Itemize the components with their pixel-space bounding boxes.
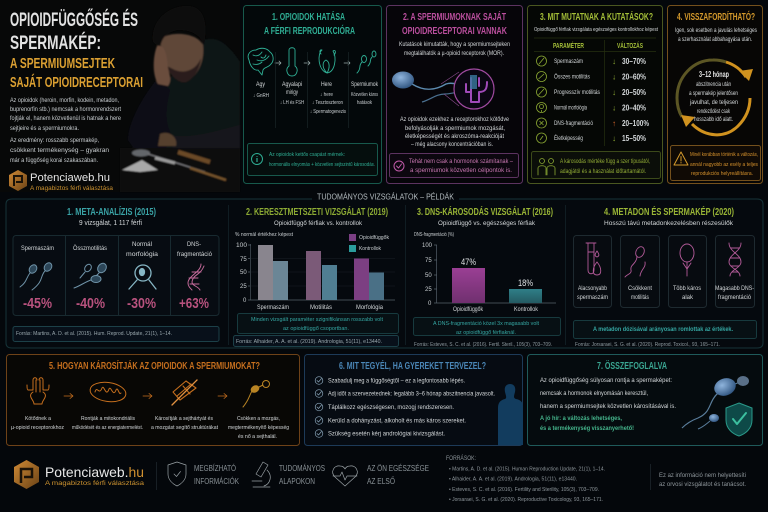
card captions: fragmentáció <box>718 295 752 301</box>
footer sources: • Esteves, S. C. et al. (2016). Fertility and Sterility, 105(3), 703–709. <box>449 487 599 493</box>
arrow <box>218 394 227 398</box>
study 2 heading: 2. KERESZTMETSZETI VIZSGÁLAT (2019) <box>246 205 388 218</box>
table rows: 15–50% <box>622 134 646 143</box>
hero title: SPERMAKÉP: <box>10 32 101 54</box>
study 2 callout: az opioidfüggő csoportban. <box>283 326 349 332</box>
step captions <box>11 416 289 440</box>
panel 4: reversibility <box>668 6 762 184</box>
column labels: ↓ here <box>320 92 333 98</box>
studies section frame <box>6 199 763 348</box>
summary text <box>540 377 676 432</box>
study 2 source: Forrás: Alhaider, A. A. et al. (2019). Andrologia, 51(11), e13440. <box>236 339 382 345</box>
column labels: ↓ LH és FSH <box>280 100 304 106</box>
study 1 metric cards: Spermaszám <box>21 246 54 252</box>
table rows: Spermaszám <box>554 59 583 65</box>
study 3 callout: A DNS-fragmentáció közel 3x magasabb volt <box>433 321 539 327</box>
study 3 bar chart: Kontrollok <box>514 307 539 313</box>
study 3: DNA damage <box>414 205 560 348</box>
icon: damaged membrane <box>172 380 197 405</box>
table rows: ↓ <box>612 57 616 66</box>
panel 7: summary <box>528 354 762 446</box>
table rows: ↓ <box>612 72 616 82</box>
trust badge: your health first: AZ ELSŐ <box>367 477 395 486</box>
card captions: Magasabb DNS- <box>715 286 754 292</box>
footer logo: Potenciaweb.hu <box>45 464 144 480</box>
card captions: spermaszám <box>577 295 608 301</box>
panel 5 heading: 5. HOGYAN KÁROSÍTJÁK AZ OPIOIDOK A SPERMIUMOKAT? <box>49 359 260 372</box>
icon: test tube with drop <box>586 243 601 275</box>
step captions: Károsítják a sejthártyát és <box>155 416 213 422</box>
hero panel <box>0 0 240 192</box>
arrow <box>275 61 281 65</box>
table rows: Életképesség <box>554 135 583 142</box>
table rows: 20–40% <box>622 104 646 112</box>
hero intro text: csökkent termékenység – gyakran <box>10 147 109 154</box>
checklist <box>315 377 495 438</box>
study 2 bar chart: Motilitás <box>310 305 332 311</box>
panel 3 subtitle: Opioidfüggő férfiak vizsgálata egészséges kontrollokhoz képest <box>534 27 659 33</box>
study 3 callout: az opioidfüggő férfiaknál. <box>456 330 516 336</box>
study 1 subtitle: 9 vizsgálat, 1 117 férfi <box>79 220 142 227</box>
table rows: Progresszív motilitás <box>554 90 600 96</box>
study 1 metric cards: +63% <box>179 295 209 312</box>
icon: magnifier over sperm <box>129 265 156 289</box>
footer sources: FORRÁSOK: <box>446 455 476 462</box>
study 3 bar chart: 25 <box>425 287 432 293</box>
table rows: 30–70% <box>622 57 646 66</box>
panel 2 body: – még alacsony koncentrációban is. <box>411 142 493 148</box>
step captions: és nő a sejthalál. <box>238 434 277 440</box>
icon: dna <box>729 243 741 276</box>
table rows: ↓ <box>612 134 616 143</box>
column labels: ↓ GnRH <box>253 93 269 99</box>
trust badge: reliable information: INFORMÁCIÓK <box>194 477 240 486</box>
trust badge: your health first: AZ ÖN EGÉSZSÉGE <box>367 464 429 473</box>
panel 6: what to do when planning a child <box>304 354 523 446</box>
study 1 heading: 1. META-ANALÍZIS (2015) <box>67 205 156 218</box>
callout: earlier is better: reprodukciós helyreállításra. <box>691 171 753 177</box>
panel 2: sperm opioid receptors <box>386 6 522 184</box>
arrow <box>64 394 73 398</box>
section heading: TUDOMÁNYOS VIZSGÁLATOK – PÉLDÁK <box>317 192 455 202</box>
icon: testes <box>319 50 335 73</box>
study 3 subtitle: Opioidfüggő vs. egészséges férfiak <box>438 220 536 227</box>
illustration: sperm with receptor <box>392 69 494 109</box>
panel 2 heading: OPIOIDRECEPTORAI VANNAK <box>402 25 507 37</box>
study 3 bar chart: Opioidfüggők <box>453 307 484 313</box>
study 2 bar chart: Morfológia <box>356 305 384 311</box>
panel 2 body: Az opioidok ezekhez a receptorokhoz kötődve <box>400 117 510 123</box>
table rows: Összes motilitás <box>554 74 590 80</box>
icon: receptor <box>27 378 49 404</box>
icon: two sperm <box>20 261 53 290</box>
study 3 callout <box>414 318 560 336</box>
footer disclaimer: Ez az információ nem helyettesíti <box>659 473 746 479</box>
summary text: nemcsak a hormonok elnyomásán keresztül, <box>540 390 648 397</box>
icon: malformed sperm <box>680 244 694 276</box>
study 1: meta-analysis <box>13 205 219 342</box>
callout: direct targets: Tehát nem csak a hormonok számítanak – <box>409 159 514 165</box>
card captions: motilitás <box>631 295 649 301</box>
checklist: Kerüld a dohányzást, alkoholt és más káros szereket. <box>328 418 466 424</box>
panel 5: how opioids damage sperm <box>6 354 300 446</box>
table rows <box>536 56 649 143</box>
panel 2 intro: megtalálhatók a µ-opioid receptorok (MOR). <box>404 51 504 57</box>
icon: brain <box>248 48 273 75</box>
step captions: µ-opioid receptorokhoz <box>11 425 64 431</box>
panel 2 intro <box>399 42 510 57</box>
callout: direct targets: a spermiumok közvetlen célpontok is. <box>410 168 512 174</box>
icon: weakened sperm <box>243 380 270 407</box>
panel 1: opioid effect on male reproduction <box>244 6 382 184</box>
card captions: Csökkent <box>628 286 652 292</box>
card captions: alak <box>682 295 694 301</box>
study 3 bar chart: 0 <box>428 301 432 307</box>
callout: double hit: Az opioidok kettős csapást mérnek: <box>269 152 345 158</box>
hero title <box>10 9 143 91</box>
panel 1 heading: A FÉRFI REPRODUKCIÓRA <box>264 24 355 37</box>
column labels: Agyalapi <box>282 82 302 88</box>
column labels <box>253 82 379 115</box>
study 2 subtitle: Opioidfüggő férfiak vs. kontrollok <box>274 220 363 227</box>
study 2 bar chart: 75 <box>240 257 247 263</box>
icon: dna <box>188 264 204 290</box>
summary text: A jó hír: a változás lehetséges, <box>540 415 622 422</box>
panel 3: research findings table <box>528 6 662 184</box>
trust badge: scientific basis <box>252 462 325 487</box>
arrow <box>344 61 350 65</box>
checklist: Táplálkozz egészségesen, mozogj rendszeresen. <box>328 404 454 411</box>
study 2 bar chart: % normál értékhez képest <box>235 232 294 238</box>
summary text: és a termékenység visszanyerhető! <box>540 425 634 432</box>
study 1 metric cards: DNS- <box>187 242 201 248</box>
hero logo <box>9 170 114 192</box>
callout: double hit <box>248 144 378 176</box>
panel 4 intro <box>675 28 757 43</box>
hero title: OPIOIDFÜGGŐSÉG ÉS <box>10 9 138 31</box>
footer sources: • Martins, A. D. et al. (2015). Human Reproduction Update, 21(1), 1–14. <box>449 466 605 472</box>
checklist: Szükség esetén kérj andrológiai kivizsgálást. <box>328 430 445 438</box>
column labels: mirigy <box>286 90 298 96</box>
study 3 bar chart <box>414 232 556 313</box>
icon: three sperm <box>74 262 108 288</box>
panel 2 heading <box>402 10 507 37</box>
callout: damage depends: adagjától és a használat időtartamától. <box>560 169 646 175</box>
study 3 bar chart: 75 <box>425 258 432 264</box>
study 4 cards <box>574 236 754 308</box>
silhouette <box>498 384 523 445</box>
study 1 metric cards <box>13 236 219 316</box>
callout: damage depends: A károsodás mértéke függ a szer típusától, <box>560 159 650 165</box>
hero title: A SPERMIUMSEJTEK <box>10 55 115 72</box>
trust badge: your health first <box>333 464 429 486</box>
table header: PARAMÉTER <box>553 41 584 50</box>
study 2 bar chart: 50 <box>240 270 247 276</box>
summary text: Az opioidfüggőség súlyosan rontja a spermaképet: <box>540 377 672 384</box>
trust badge: scientific basis: ALAPOKON <box>279 477 315 486</box>
study 2 bar chart: 0 <box>243 298 247 304</box>
study 3 bar chart: 100 <box>422 243 433 249</box>
icon: sperm cells <box>357 51 376 73</box>
checklist: Adj időt a szervezetednek: legalább 3–6 hónap abszitnencia javasolt. <box>328 390 495 398</box>
panel 2 body: életképességét és akroszóma-reakcióját <box>405 134 504 140</box>
recovery ring: rendeződést csak <box>697 109 731 115</box>
study 3 bar chart: 50 <box>425 273 432 279</box>
table rows: 20–100% <box>622 119 649 128</box>
callout: damage depends <box>532 152 660 178</box>
column labels: ↓ Spermatogenezis <box>310 109 346 115</box>
arrow <box>143 394 152 398</box>
recovery ring: hosszabb idő alatt. <box>694 117 733 123</box>
panel 2 body: befolyásolják a spermiumok mozgását, <box>405 126 505 132</box>
study 2 bar chart: 100 <box>236 243 248 249</box>
table rows: ↓ <box>612 104 616 112</box>
callout: direct targets <box>390 154 518 178</box>
checklist: Szabadulj meg a függőségtől – ez a legfontosabb lépés. <box>328 378 465 384</box>
panel 7 heading: 7. ÖSSZEFOGLALVA <box>597 359 667 372</box>
study 1 source <box>13 326 219 342</box>
study 2 bar chart: Opioidfüggők <box>359 235 390 241</box>
recovery ring: a spermakép jelentősen <box>689 91 738 97</box>
study 1 source: Forrás: Martins, A. D. et al. (2015). Hum. Reprod. Update, 21(1), 1–14. <box>16 331 172 337</box>
hero intro text: buprenorfin stb.) nemcsak a hormonrendszert <box>10 106 121 113</box>
recovery ring: abszitnencia után <box>696 82 731 88</box>
table rows: DNS-fragmentáció <box>554 121 594 127</box>
hero title: SAJÁT OPIOIDRECEPTORAI <box>10 74 143 91</box>
recovery ring: javulhat, de teljesen <box>689 100 738 106</box>
column labels: hatások <box>357 100 372 106</box>
panel 2 heading: 2. A SPERMIUMOKNAK SAJÁT <box>403 10 506 23</box>
study 2 callout: Minden vizsgált paraméter szignifikánsan rosszabb volt <box>251 317 383 323</box>
footer sources <box>446 455 605 503</box>
study 4 subtitle: Hosszú távú metadonkezelésben részesülők <box>604 220 734 227</box>
panel 1 heading <box>264 10 355 37</box>
study 3 heading: 3. DNS-KÁROSODÁS VIZSGÁLAT (2016) <box>417 205 553 218</box>
panel 3 heading: 3. MIT MUTATNAK A KUTATÁSOK? <box>540 10 653 23</box>
icon: sperm <box>625 245 646 277</box>
card captions: Alacsonyabb <box>578 286 608 292</box>
table rows: ↑ <box>612 119 616 128</box>
trust badge: reliable information: MEGBÍZHATÓ <box>194 464 236 473</box>
panel 6 heading: 6. MIT TEGYÉL, HA GYEREKET TERVEZEL? <box>339 359 486 372</box>
study 2 bar chart <box>235 232 395 311</box>
summary text: hanem a spermiumsejtek közvetlen károsításával is. <box>540 403 676 410</box>
study 4 source: Forrás: Jorsaraei, S. G. et al. (2020). Reprod. Toxicol., 93, 165–171. <box>575 342 720 348</box>
study 2 bar chart: Spermaszám <box>257 305 289 311</box>
table rows: ↓ <box>612 88 616 97</box>
study 2 callout <box>238 314 398 334</box>
column labels: Here <box>321 82 333 88</box>
study 1 metric cards: Normál <box>132 242 152 248</box>
hero illustration: man with head in hand and drugs on table <box>120 6 240 192</box>
table header: VÁLTOZÁS <box>617 41 643 50</box>
study 2 bar chart: Kontrollok <box>359 246 381 252</box>
table header <box>534 38 656 146</box>
hero intro text: fojtják el, hanem közvetlenül is hatnak a here <box>10 115 121 122</box>
study 4: methadone <box>574 205 756 348</box>
step captions: Csökken a mozgás, <box>237 416 280 422</box>
study 1 metric cards: fragmentáció <box>177 252 213 258</box>
trust badge: scientific basis: TUDOMÁNYOS <box>279 464 325 473</box>
step captions: működését és az energiatermelést. <box>72 425 143 431</box>
step captions: Kötődnek a <box>25 416 52 422</box>
study 3 bar chart: DNS-fragmentáció (%) <box>414 232 454 238</box>
study 4 callout: A metadon dózisával arányosan romlottak az értékek. <box>593 327 733 333</box>
recovery ring: 3–12 hónap <box>699 69 729 79</box>
table rows: 20–60% <box>622 72 646 82</box>
footer logo: A magabiztos férfi választása <box>45 480 144 487</box>
arrow <box>304 61 310 65</box>
illustration: sperm and shield <box>682 375 752 436</box>
footer disclaimer: az orvosi vizsgálatot és tanácsot. <box>659 482 746 488</box>
hero intro text <box>10 97 121 164</box>
callout: double hit: hormonális elnyomás + közvetlen sejtszintű károsodás. <box>269 162 375 168</box>
study 1 metric cards: -45% <box>23 295 52 312</box>
trust badge: reliable information <box>168 462 240 486</box>
step captions: megtermékenyítő képesség <box>228 425 289 431</box>
panel 2 intro: Kutatások kimutatták, hogy a spermiumsejteken <box>399 42 510 48</box>
column labels: ↓ Tesztoszteron <box>312 100 343 106</box>
recovery ring <box>677 60 753 135</box>
icon: mitochondrion <box>89 380 127 404</box>
step captions: Rontják a mitokondriális <box>81 416 135 422</box>
footer sources: • Alhaider, A. A. et al. (2019). Andrologia, 51(11), e13440. <box>449 476 577 482</box>
card captions <box>577 286 754 301</box>
study 3 bar chart: 18% <box>518 278 533 288</box>
column labels: Agy <box>256 82 265 88</box>
hero intro text: sejtjeire és a spermiumokra. <box>10 125 79 132</box>
footer logo <box>14 460 144 489</box>
icon: thermometer pituitary <box>287 48 297 76</box>
card captions: Több káros <box>673 286 701 292</box>
study 3 source: Forrás: Esteves, S. C. et al. (2016). Fertil. Steril., 105(3), 703–709. <box>414 342 552 348</box>
panel 1 heading: 1. OPIOIDOK HATÁSA <box>272 10 345 23</box>
hero intro text: Az eredmény: rosszabb spermakép, <box>10 137 99 144</box>
study 1 metric cards: morfológia <box>126 252 159 258</box>
study 1 metric cards: -30% <box>127 295 156 312</box>
column labels: Közvetlen káros <box>351 92 378 98</box>
column labels: Spermiumok <box>351 82 379 88</box>
callout: earlier is better <box>670 146 760 180</box>
study 4 callout <box>574 320 756 338</box>
footer disclaimer <box>659 473 746 488</box>
table rows: 20–50% <box>622 88 646 97</box>
study 2 bar chart: 25 <box>240 284 247 290</box>
study 1 metric cards: -40% <box>76 295 105 312</box>
panel 2 body <box>400 117 510 148</box>
study 2: cross-sectional <box>234 205 398 346</box>
step captions: a mozgást segítő struktúrákat <box>151 425 218 431</box>
study 2 source <box>234 336 398 346</box>
table rows: Normál morfológia <box>554 106 587 112</box>
study 1 metric cards: Összmotilitás <box>73 245 107 252</box>
hero logo: A magabiztos férfi választása <box>30 186 114 192</box>
hero logo: Potenciaweb.hu <box>30 172 110 184</box>
hero intro text: már a függőség korai szakaszában. <box>10 157 98 164</box>
hero intro text: Az opioidok (heroin, morfin, kodein, metadon, <box>10 97 119 104</box>
callout: earlier is better: annál nagyobb az esély a teljes <box>690 162 758 168</box>
footer sources: • Jorsaraei, S. G. et al. (2020). Reproductive Toxicology, 93, 165–171. <box>449 497 603 503</box>
study 3 bar chart: 47% <box>461 257 476 267</box>
